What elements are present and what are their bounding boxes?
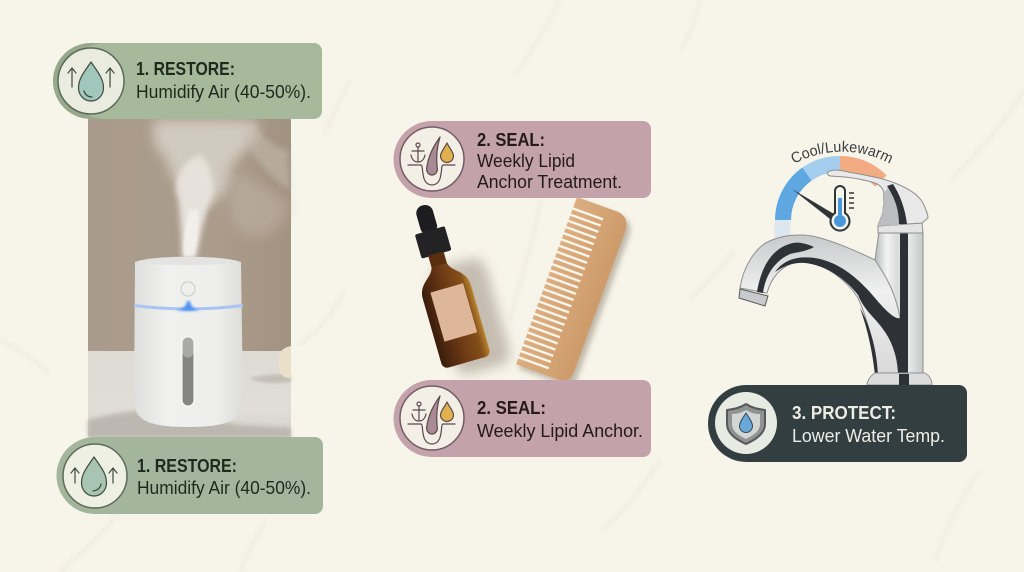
- pill: 1. restore (bottom): [56, 437, 323, 514]
- text: restore: [137, 456, 311, 498]
- soap: [278, 346, 291, 378]
- spout and column: [740, 232, 923, 376]
- needle: [792, 189, 834, 219]
- pill: 3. protect: [708, 385, 967, 462]
- text: restore: Humidify Air (40-50%).: [136, 82, 311, 102]
- collar: [878, 223, 923, 233]
- aerator: [739, 289, 768, 306]
- icon: water drop with arrows: [58, 48, 124, 114]
- text: restore: 1. RESTORE:: [137, 456, 237, 476]
- oil bottle: [398, 193, 513, 381]
- text: seal: [477, 398, 643, 441]
- text: seal: 2. SEAL:: [477, 398, 546, 418]
- pill: 1. restore (top): [53, 43, 322, 119]
- text: seal: [477, 130, 622, 192]
- icon: anchor, hair follicle, oil drop: [400, 127, 464, 191]
- icon: anchor, hair follicle, oil drop: [400, 386, 464, 450]
- pill: 2. seal (bottom): [394, 380, 651, 457]
- thermometer: [830, 186, 854, 231]
- wooden comb: [515, 197, 635, 388]
- bottle label: [430, 283, 477, 342]
- icon: water drop with arrows: [63, 444, 127, 508]
- text: restore: Humidify Air (40-50%).: [137, 478, 311, 498]
- temperature gauge: [774, 140, 892, 238]
- text: restore: [136, 59, 311, 102]
- handle lever: [827, 170, 928, 226]
- text: protect: [792, 403, 945, 446]
- base: [867, 373, 932, 385]
- icon: shield with water drop: [715, 392, 777, 454]
- label: cool/lukewarm: Cool/Lukewarm: [792, 140, 892, 164]
- text: seal: Weekly Lipid Anchor.: [477, 421, 643, 441]
- humidifier body: [134, 257, 243, 427]
- text: seal: Weekly Lipid: [477, 151, 575, 171]
- dark chrome reflections: [757, 226, 908, 376]
- chrome faucet: [739, 170, 932, 385]
- text: protect: Lower Water Temp.: [792, 426, 945, 446]
- text: restore: 1. RESTORE:: [136, 59, 235, 79]
- photo: humidifier: [88, 119, 291, 437]
- pill: 2. seal (top): [394, 121, 651, 198]
- steam: [153, 120, 290, 258]
- wall and tabletop: [88, 119, 291, 437]
- comb teeth gaps: [533, 213, 588, 364]
- text: seal: 2. SEAL:: [477, 130, 545, 150]
- text: seal: Anchor Treatment.: [477, 172, 622, 192]
- text: protect: 3. PROTECT:: [792, 403, 896, 423]
- gauge arc segments: [782, 164, 881, 238]
